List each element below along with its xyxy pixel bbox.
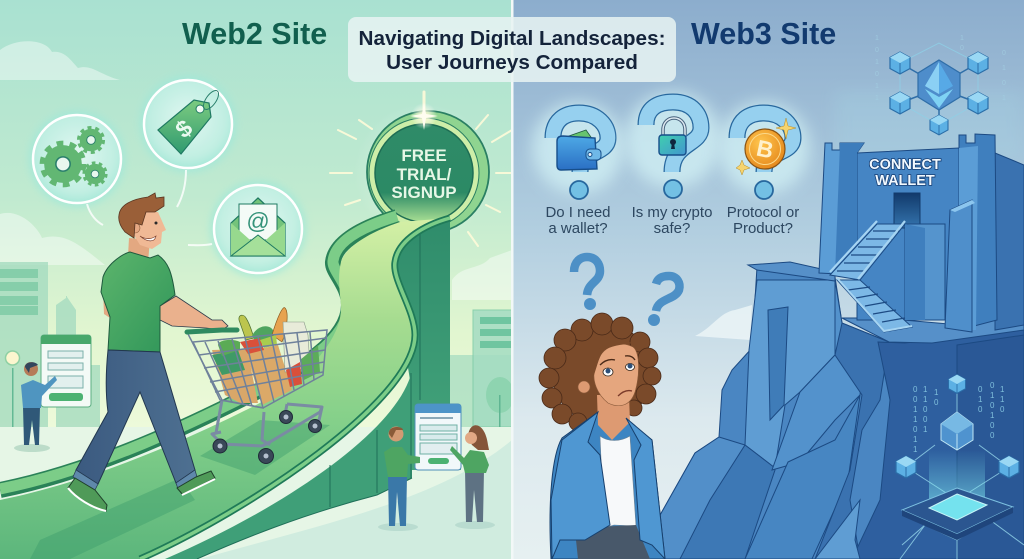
top node [948,375,966,393]
gear large [43,144,83,184]
fortress [819,134,1024,332]
tree [486,377,514,427]
binary left: 0 [934,398,939,407]
door [894,193,920,228]
ethereum diamond [925,62,953,108]
green ramp road [0,216,450,559]
signup badge: SIGNUP [391,183,457,202]
data rain backdrop: 1 [875,35,879,42]
cloud behind cliff [695,305,752,340]
street lamp [6,351,20,428]
neck [128,238,150,262]
envelope: @ [246,208,270,234]
binary right: 1 [990,391,995,400]
background city left [0,262,100,427]
sparkles [776,118,796,139]
clouds left [0,41,512,300]
signup badge: TRIAL/ [397,165,452,184]
building windows left [0,269,38,315]
wheels [213,410,322,464]
gear top [79,128,103,152]
binary left: 1 [913,435,918,444]
ground right shade [200,440,512,559]
small person with form, left [14,335,91,452]
data cube [941,412,973,450]
far right wall [995,153,1024,330]
form panel [41,335,91,407]
question: lock: safe? [654,220,690,237]
cart handle [187,330,237,332]
sign: CONNECT [869,157,941,173]
bangs [590,340,632,386]
panel: Web3 site [512,0,1024,559]
ethereum network [890,43,988,135]
bitcoin coin: B [754,135,776,163]
data rain backdrop: 1 [875,95,879,102]
shopping man [68,193,228,511]
data rain backdrop: 1 [875,83,879,90]
question label: Protocol or [727,204,799,221]
neck [597,395,630,440]
binary left: 1 [923,425,928,434]
title box: Navigating Digital Landscapes: [359,27,665,50]
data rain backdrop: 1 [1002,65,1006,72]
confused woman [539,313,665,559]
ground [0,427,512,559]
woman [450,425,489,522]
binary right: 1 [1000,395,1005,404]
side nodes [896,456,916,478]
ear [578,381,590,393]
binary right: 0 [990,421,995,430]
binary left: 0 [923,415,928,424]
pair of people with form, right [378,404,495,531]
Web2 heading: Web2 Site [182,17,327,51]
background city right [450,310,512,427]
star highlight [410,102,438,130]
data rain backdrop: 0 [875,71,879,78]
mouth [618,391,632,396]
question: lock [625,92,721,237]
binary right: 1 [978,395,983,404]
floating question mark 1 [574,257,600,310]
binary left: 1 [934,388,939,397]
title box: User Journeys Compared [386,51,638,74]
main wall [857,148,959,320]
basket grid [187,330,327,408]
lock icon [659,118,686,155]
upper ledge [748,262,835,281]
web form panel [415,404,461,470]
binary right: 0 [978,405,983,414]
Web3 heading: Web3 Site [691,17,836,51]
wallet icon [557,130,601,170]
lower staircase [837,278,912,332]
badge label: FREE [401,146,447,165]
road shadows [30,420,330,559]
light rays [330,92,512,246]
price tag: $ [171,114,199,144]
question label: Do I need [545,204,611,221]
data rain backdrop: 0 [875,47,879,54]
front arm [160,296,228,330]
rear arm [103,290,110,318]
lapels [551,412,665,559]
binary right: 1 [1000,385,1005,394]
right tower [959,134,997,330]
binary left: 0 [913,395,918,404]
light beam [929,450,985,510]
panel: Web2 site [0,0,514,559]
data rain backdrop [835,35,1024,160]
question: wallet [532,102,624,237]
question label: Is my crypto [632,204,712,221]
floating question mark 2 [648,276,680,326]
curly hair [539,313,661,431]
lower platform [842,315,1024,343]
front shoe [177,471,215,495]
question: wallet: a wallet? [548,220,608,237]
rear shoe [68,478,107,511]
buttress [945,200,972,332]
cart frame [212,400,322,446]
cuffs [73,470,197,490]
binary left: 0 [913,425,918,434]
binary right: 0 [978,385,983,394]
binary left: 1 [913,445,918,454]
shirt [600,436,636,528]
data rain backdrop: 0 [960,45,964,52]
question: bitcoin [718,102,810,237]
binary left: 0 [923,405,928,414]
binary left: 0 [913,385,918,394]
binary left: 1 [923,395,928,404]
upper staircase [830,221,905,280]
data rain backdrop: 1 [875,59,879,66]
binary right: 0 [990,401,995,410]
network nodes [890,52,910,74]
binary right: 0 [990,431,995,440]
center divider [511,0,514,559]
thought bubble: gears [29,111,125,225]
fortress: WALLET [875,173,935,189]
chip [902,488,1013,540]
torso [101,252,175,352]
binary right: 0 [1000,405,1005,414]
left tower [819,143,864,275]
title box [348,17,676,82]
question: bitcoin: Product? [733,220,793,237]
thought bubble: email [188,181,306,277]
data rain backdrop: 0 [1002,80,1006,87]
binary left: 1 [923,385,928,394]
eyes [600,356,635,376]
head [119,193,166,249]
data rain backdrop: 0 [1002,50,1006,57]
ramp pillar [397,218,461,470]
binary right: 1 [990,411,995,420]
signup badge [330,92,512,246]
jacket [550,412,665,559]
ramp underside wall [165,370,412,559]
data rain backdrop: 1 [1002,95,1006,102]
trousers [576,525,650,559]
binary right: 0 [990,381,995,390]
shopping cart [187,308,327,464]
jeans [76,350,195,484]
binary left: 1 [913,405,918,414]
blockchain chip diagram [896,375,1024,559]
groceries [212,308,320,405]
binary left: 1 [913,415,918,424]
face [594,344,639,406]
data rain backdrop: 1 [960,35,964,42]
blue rocky cliff [659,267,1024,559]
inner block [905,224,945,320]
gear small [84,163,106,185]
hex node [918,60,960,110]
man [384,426,420,526]
thought bubble: price tag [140,76,236,207]
network lines [900,392,1024,559]
